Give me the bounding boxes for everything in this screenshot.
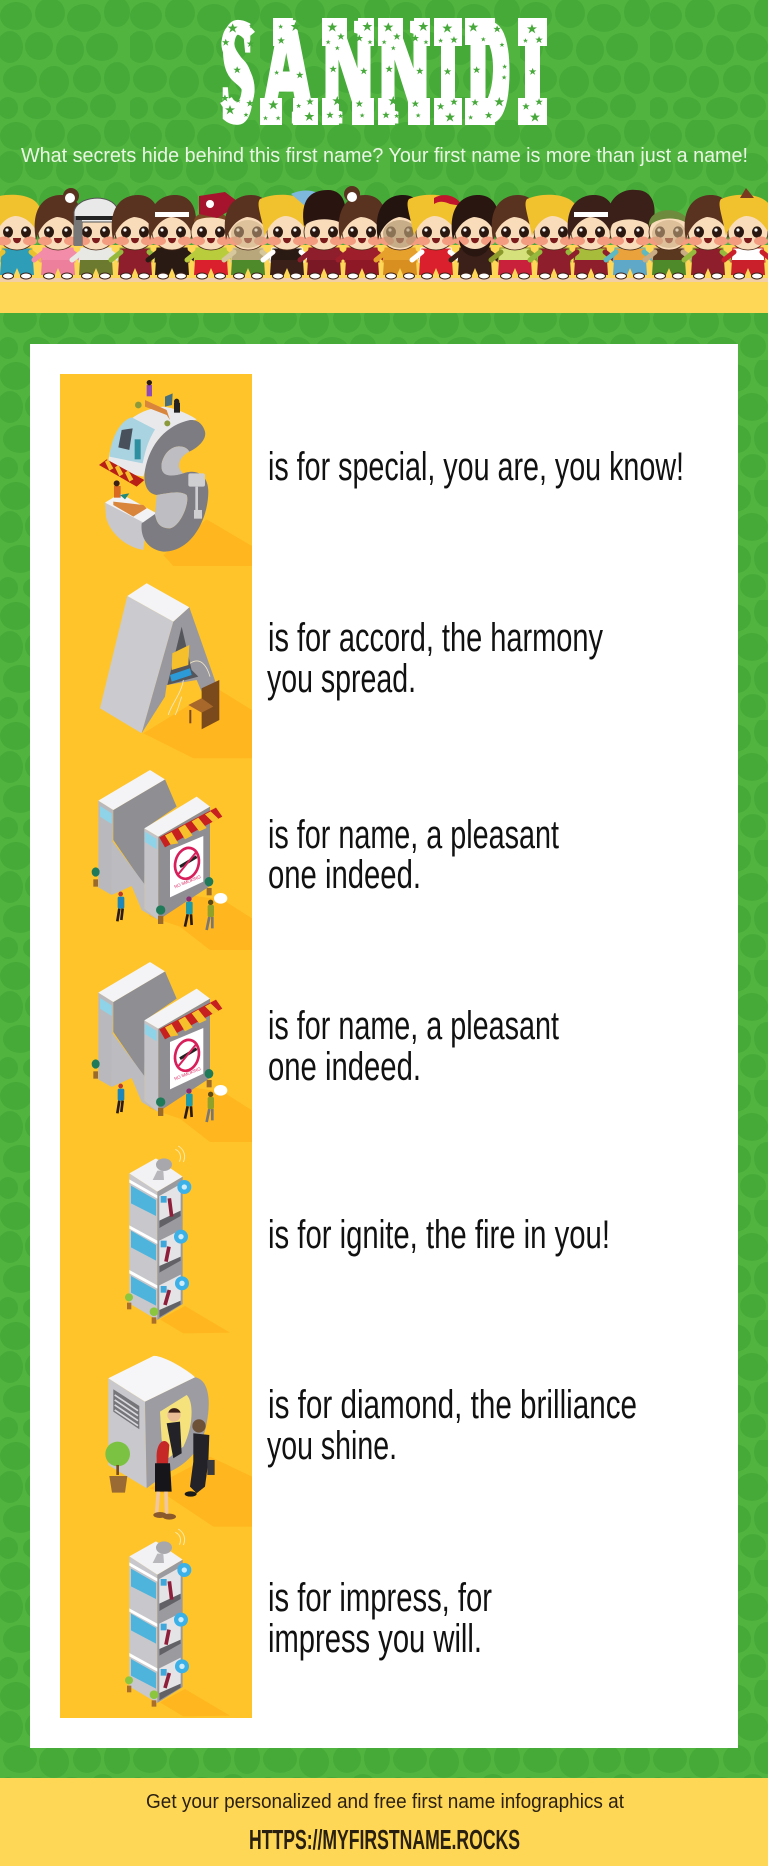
text: first N lines: one indeed. bbox=[268, 853, 421, 897]
text: D lines: you shine. bbox=[267, 1424, 397, 1468]
row of chibi children bbox=[0, 186, 768, 279]
white content panel bbox=[30, 344, 738, 1748]
icon: isometric letter S bbox=[99, 380, 252, 566]
icon: tower letter I (first) bbox=[125, 1146, 230, 1333]
text: D lines bbox=[267, 1383, 637, 1468]
text: A lines bbox=[267, 616, 603, 701]
text: second N lines bbox=[268, 1004, 559, 1089]
text: A lines: is for accord, the harmony bbox=[268, 616, 603, 660]
text: first N lines: is for name, a pleasant bbox=[268, 813, 559, 857]
text: last I lines: impress you will. bbox=[268, 1617, 482, 1661]
yellow illustration column bbox=[60, 374, 252, 1718]
title: SANNIDI bbox=[221, 0, 547, 152]
icon: isometric letter D bbox=[105, 1356, 252, 1527]
text: last I lines: is for impress, for bbox=[268, 1576, 492, 1620]
icon: isometric letter N (second) bbox=[92, 962, 252, 1142]
yellow band behind characters bbox=[0, 245, 768, 313]
text: D lines: is for diamond, the brilliance bbox=[268, 1383, 637, 1427]
icon: isometric letter A bbox=[100, 583, 252, 758]
text: I line: is for ignite, the fire in you! bbox=[268, 1213, 610, 1257]
text: A lines: you spread. bbox=[267, 657, 416, 701]
icon: tower letter I (second) bbox=[125, 1529, 230, 1716]
text: first N lines bbox=[268, 813, 559, 897]
text: second N lines: one indeed. bbox=[268, 1045, 421, 1089]
subtitle: What secrets hide behind this first name? Your first name is more than just a name! bbox=[21, 145, 748, 167]
footer text: Get your personalized and free first name infographics at bbox=[146, 1791, 624, 1813]
icon: isometric letter N (first) bbox=[92, 770, 252, 950]
text: last I lines bbox=[268, 1576, 492, 1661]
footer band bbox=[0, 1778, 768, 1866]
footer url: HTTPS://MYFIRSTNAME.ROCKS bbox=[249, 1824, 520, 1855]
text: second N lines: is for name, a pleasant bbox=[268, 1004, 559, 1048]
